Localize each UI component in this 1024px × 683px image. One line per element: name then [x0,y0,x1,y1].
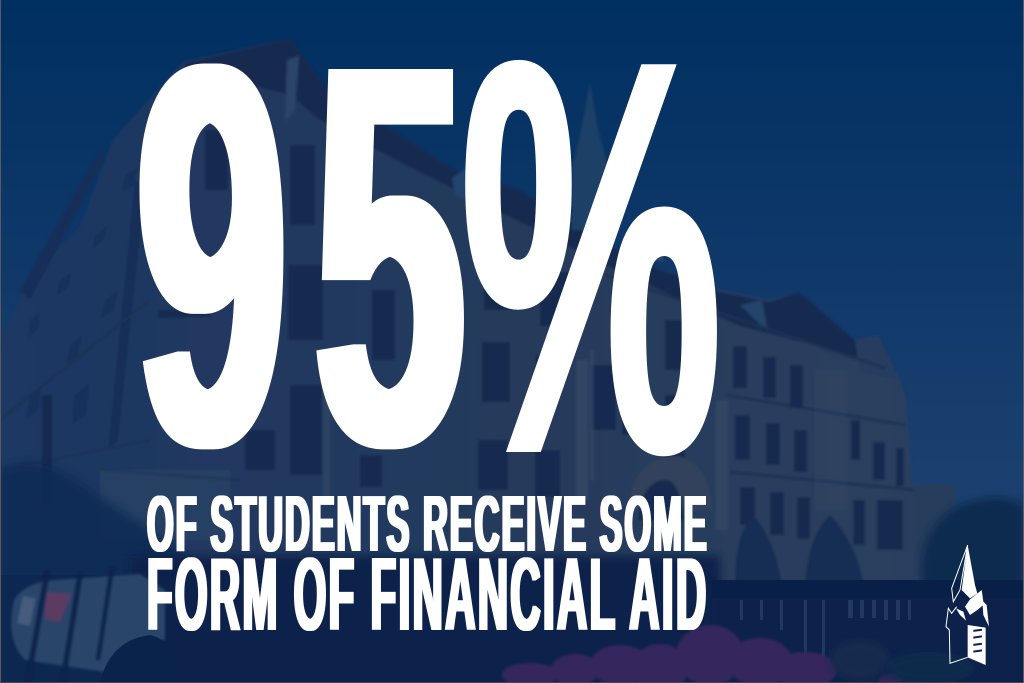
big statistic: 95% [136,0,723,565]
green bushes [830,640,890,680]
foreground shadow: trees left [0,463,240,683]
edge strips [0,0,1,683]
roof [183,38,886,366]
cornices [0,275,915,490]
spire [572,82,610,230]
right trees [921,498,1024,590]
left wing window slits [26,168,138,425]
foreground: hedge and fence [0,556,1024,683]
flowers [502,625,902,683]
upper windows [42,130,904,550]
distant building and trees [915,484,955,554]
light pillars [100,350,847,540]
left wing dark stripes [20,150,104,300]
car [11,574,165,672]
entrance arch [628,456,712,510]
caption: FORM OF FINANCIAL AID [147,536,709,652]
fence right [712,580,1024,598]
icon: university spire logo [946,545,989,665]
fence bars left [25,568,114,683]
caption [147,479,709,652]
caption: OF STUDENTS RECEIVE SOME [147,479,709,569]
